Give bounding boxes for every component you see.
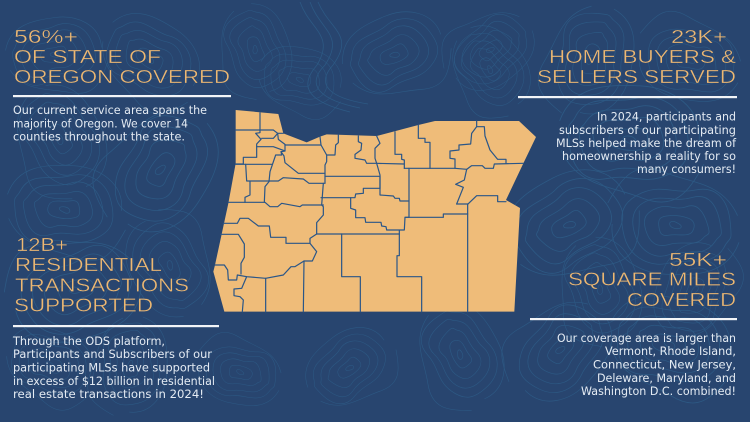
body text: majority of Oregon. We cover 14 [13,118,188,130]
body text: real estate transactions in 2024! [13,388,204,401]
heading: 23K+ home buyers and sellers served: SELLERS SERVED [537,66,736,87]
body text: Our coverage area is larger than [557,332,736,345]
body text: Washington D.C. combined! [581,385,736,398]
rule [13,95,231,97]
body text: homeownership a reality for so [562,150,736,163]
heading: 56%+ of state of Oregon covered: 56%+ [14,26,78,47]
body text: participating MLSs have supported [13,362,210,374]
body text: Through the ODS platform, [12,335,165,348]
heading: 12B+ residential transactions supported: RESIDENTIAL [15,254,162,275]
panel: buyers and sellers served [518,26,737,176]
body text: MLSs helped make the dream of [556,137,737,150]
body text: Deleware, Maryland, and [597,372,736,385]
panel: transactions supported [12,234,219,401]
body text: in excess of $12 billion in residential [13,375,215,388]
body text: Vermont, Rhode Island, [605,345,736,358]
body text: In 2024, participants and [597,110,736,124]
body text [13,104,207,144]
heading: 23K+ home buyers and sellers served: HOME BUYERS & [549,46,737,67]
body text: subscribers of our participating [559,124,736,137]
body text: counties throughout the state. [13,130,185,144]
heading: 12B+ residential transactions supported: 12B+ [16,234,68,255]
body text: many consumers! [637,163,736,176]
heading: 12B+ residential transactions supported [14,234,189,316]
heading: 55K+ square miles covered: COVERED [627,289,736,310]
state outline [213,110,536,312]
heading: 12B+ residential transactions supported: SUPPORTED [14,294,153,316]
heading: 56%+ of state of Oregon covered: OREGON COVERED [14,66,230,87]
body text: Participants and Subscribers of our [13,348,212,361]
body text: Our current service area spans the [13,104,207,117]
heading: 23K+ home buyers and sellers served [537,26,737,87]
county boundaries [215,113,523,312]
panel: state coverage [13,26,231,144]
rule [518,96,737,98]
panel: square miles covered [530,249,737,398]
body text: Connecticut, New Jersey, [593,358,736,372]
heading: 55K+ square miles covered: SQUARE MILES [568,269,736,290]
heading: 56%+ of state of Oregon covered [14,26,230,87]
heading: 12B+ residential transactions supported: TRANSACTIONS [15,274,189,296]
heading: 23K+ home buyers and sellers served: 23K+ [671,26,727,47]
rule [13,325,219,327]
body text [12,335,215,401]
heading: 56%+ of state of Oregon covered: OF STATE OF [14,46,161,67]
map: Oregon counties [213,110,536,312]
heading: 55K+ square miles covered: 55K+ [669,249,727,270]
body text [557,332,736,398]
heading: 55K+ square miles covered [568,249,736,310]
rule [530,318,737,320]
body text [556,110,737,176]
